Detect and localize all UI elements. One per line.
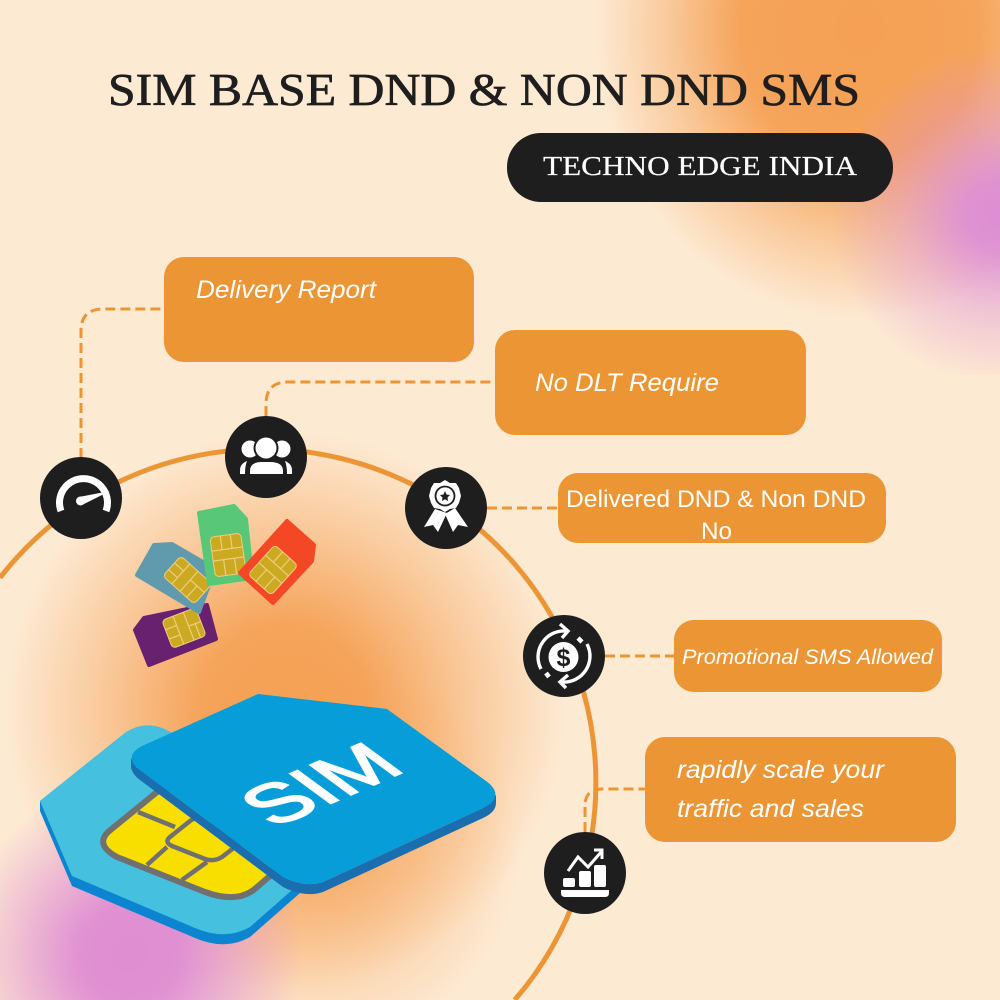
front SIM card side bbox=[131, 758, 496, 894]
SIM: purple bbox=[135, 605, 216, 665]
panel: scale traffic bbox=[645, 737, 956, 842]
label line 2: No bbox=[701, 518, 732, 545]
label line 1: rapidly scale your bbox=[677, 756, 886, 784]
icon: growth chart bbox=[544, 832, 626, 914]
brand name: TECHNO EDGE INDIA bbox=[543, 151, 858, 181]
panel: promotional SMS bbox=[674, 620, 942, 692]
connector: no DLT bbox=[266, 382, 495, 416]
icon: people bbox=[225, 416, 307, 498]
icon: speedometer bbox=[40, 457, 122, 539]
connector: scale traffic bbox=[585, 789, 645, 832]
SIM: teal bbox=[137, 544, 215, 612]
label: Delivery Report bbox=[196, 276, 377, 304]
front SIM card face bbox=[132, 694, 495, 884]
icon: dollar exchange: $ bbox=[557, 644, 571, 672]
small SIM cards group bbox=[135, 506, 314, 665]
large circle arc bbox=[0, 449, 596, 1000]
label: No DLT Require bbox=[535, 369, 719, 397]
SIM: green bbox=[199, 506, 252, 584]
icon: award ribbon bbox=[405, 467, 487, 549]
label line 1: Delivered DND & Non DND bbox=[566, 486, 866, 513]
gradient blob: bottom left bbox=[0, 420, 600, 1000]
connector: delivery report bbox=[81, 309, 163, 458]
SIM label: SIM bbox=[222, 732, 420, 837]
panel: delivery report bbox=[164, 257, 474, 362]
connector: promotional SMS bbox=[605, 654, 674, 658]
label: Promotional SMS Allowed bbox=[682, 646, 934, 669]
panel: no DLT bbox=[495, 330, 806, 435]
gold chip bbox=[103, 780, 300, 897]
label line 2: traffic and sales bbox=[677, 795, 864, 823]
SIM: red bbox=[240, 521, 314, 603]
back SIM card bbox=[40, 726, 300, 944]
icon: dollar exchange bbox=[523, 615, 605, 697]
large SIM illustration bbox=[40, 694, 496, 944]
gradient blob: top right bbox=[500, 0, 1000, 375]
panel: delivered DND bbox=[558, 473, 886, 545]
title: SIM BASE DND & NON DND SMS bbox=[108, 65, 860, 115]
brand pill bbox=[507, 133, 893, 202]
connector: delivered DND bbox=[487, 506, 558, 510]
